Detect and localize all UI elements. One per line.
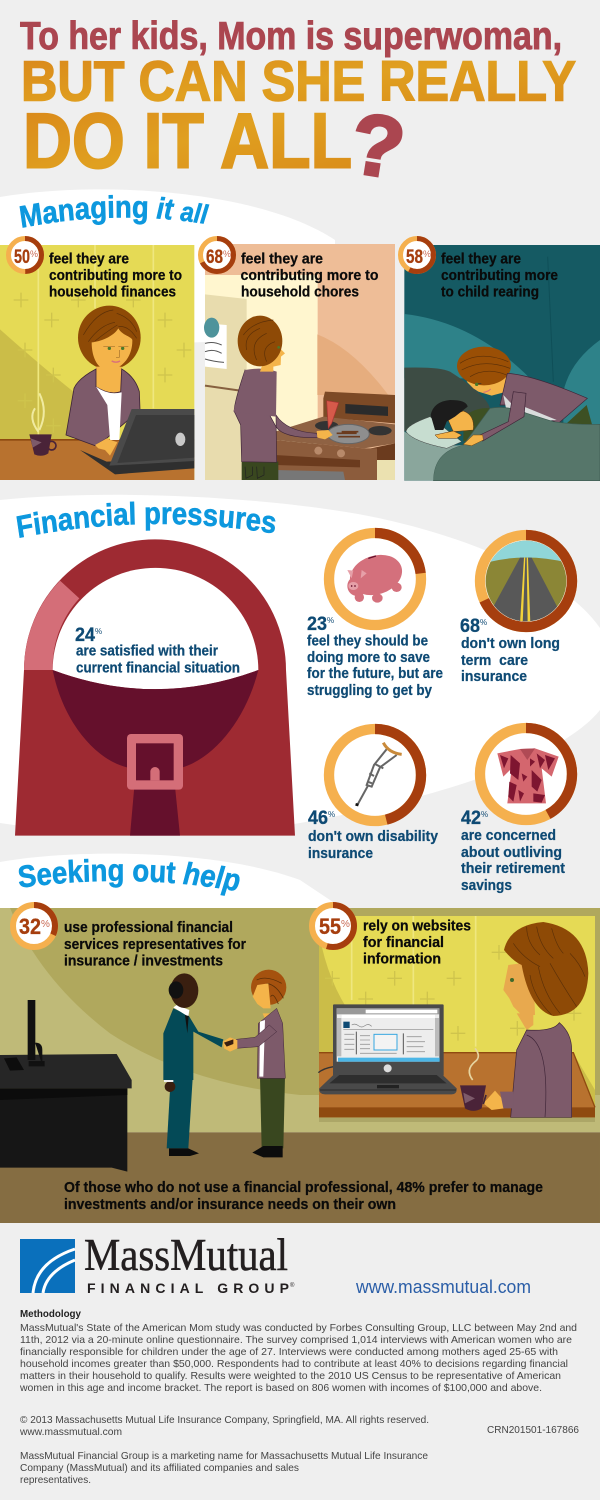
text: chores [240, 250, 378, 300]
text: chores: household chores [241, 284, 359, 300]
text: websites [363, 918, 471, 968]
logo: MassMutual: FINANCIAL GROUP [87, 1280, 289, 1296]
badge: 68%: 68 [206, 247, 223, 268]
text: marketing name note: MassMutual Financial Group is a marketing name for Massachusetts Mutual Life Insurance [20, 1450, 428, 1462]
text: 23% save: % [327, 616, 334, 625]
text: methodology: Methodology [20, 1308, 81, 1320]
text: 23% save: for the future, but are [307, 665, 443, 682]
heading: Seeking out help: Seeking out help [18, 858, 240, 896]
text: methodology: 11th, 2012 via a 20-minute online questionnaire. The survey comprised 1,014 interviews with American women who are [20, 1334, 572, 1346]
text: professional representatives: insurance / investments [64, 952, 223, 970]
text: 48% callout: investments and/or insurance needs on their own [64, 1196, 396, 1213]
text: 46% disability: 46 [308, 808, 328, 829]
icon: woman shaking hands [223, 970, 286, 1157]
badge: 32%: 32 [19, 914, 41, 939]
badge: 50%: 50 [14, 247, 30, 268]
icon: piggy bank [345, 548, 407, 603]
text: 68% long term care: term care [461, 652, 528, 669]
icon: coffee cup [29, 393, 56, 456]
heading: Financial pressures: Financial pressures [16, 502, 276, 538]
text: websites: rely on websites [363, 918, 471, 934]
chart: 46% crutch ring [329, 729, 421, 821]
logo: MassMutual: ® [290, 1282, 295, 1289]
text: child rearing: to child rearing [441, 284, 539, 300]
chart: 23% piggy ring [329, 533, 421, 625]
text: methodology: women in this age and income bracket. The report is based on 806 women with incomes of $100,000 and above. [19, 1382, 542, 1394]
badge: 32%: % [41, 919, 50, 930]
text: copyright: www.massmutual.com [19, 1426, 122, 1438]
text: 46% disability: don't own disability [308, 828, 439, 845]
link: website: www.massmutual.com [355, 1277, 531, 1297]
heading: Managing it all: Managing it all [20, 194, 210, 228]
badge: 50% [8, 238, 42, 272]
icon: coffee cup [460, 1048, 486, 1111]
icon: stove [275, 392, 395, 480]
text: 46% disability: insurance [308, 845, 373, 862]
text: 24% satisfied: % [95, 627, 102, 636]
badge: 55%: 55 [319, 914, 341, 939]
text: 23% save: struggling to get by [307, 682, 433, 699]
text: professional representatives [64, 919, 246, 970]
text: 24% satisfied: current financial situation [76, 660, 240, 676]
badge: 58%: 58 [406, 247, 423, 268]
text: websites: for financial [363, 934, 444, 951]
text: 42% retirement: their retirement [461, 860, 565, 877]
badge: 32% [13, 905, 55, 947]
icon: mother and sleeping child [404, 347, 600, 481]
title: DO IT ALL [23, 96, 352, 184]
text: 48% callout [64, 1179, 543, 1213]
badge: 68%: % [223, 249, 231, 259]
logo: MassMutual: MassMutual [84, 1230, 288, 1280]
text: 42% retirement: savings [461, 877, 512, 894]
text: finances [49, 250, 182, 300]
icon: crutch [357, 743, 402, 806]
icon: woman cooking [233, 316, 333, 480]
text: professional representatives: services representatives for [64, 936, 246, 953]
text: 42% retirement: % [481, 810, 488, 819]
text: methodology: household incomes greater than $50,000. Respondents had to contribute at least 40% to decisions regarding financial [20, 1358, 568, 1370]
text: CRN code: CRN201501-167866 [487, 1424, 579, 1436]
text: 23% save: feel they should be [307, 632, 428, 650]
text: copyright [19, 1414, 429, 1438]
icon: woman at laptop [66, 306, 141, 456]
badge: 58% [400, 238, 434, 272]
text: chores: contributing more to [240, 267, 378, 284]
text: methodology: financially responsible for children under the age of 27. Interviews were conducted among mothers aged 25-65 with [20, 1346, 558, 1358]
text: professional representatives: use professional financial [64, 919, 233, 936]
text: child rearing [441, 250, 558, 300]
chart: 68% road ring [480, 535, 572, 627]
icon: laptop [80, 409, 194, 474]
icon: laptop with website [318, 1004, 457, 1094]
badge: 55%: % [341, 919, 350, 930]
text: 68% long term care: % [480, 618, 487, 627]
text: 24% satisfied: are satisfied with their [76, 642, 218, 660]
text: 68% long term care: insurance [461, 668, 527, 685]
text: finances: household finances [49, 284, 176, 300]
badge: 58%: % [423, 249, 431, 259]
text: 46% disability: % [328, 810, 335, 819]
text: 42% retirement [461, 808, 565, 894]
text: methodology: MassMutual's State of the American Mom study was conducted by Forbes Consulting Group, LLC between May 2nd and [20, 1322, 577, 1334]
text: methodology [19, 1308, 577, 1394]
chart: purse 24% [15, 539, 295, 836]
panel: household finances [0, 245, 194, 480]
text: websites: information [363, 950, 441, 968]
text: 23% save: 23 [307, 614, 327, 635]
icon: man in suit [163, 973, 223, 1156]
text: marketing name note [20, 1450, 428, 1486]
text: 46% disability [308, 808, 439, 862]
icon: desk and monitor [0, 1000, 132, 1172]
text: copyright: © 2013 Massachusetts Mutual Life Insurance Company, Springfield, MA. All rights reserved. [20, 1414, 429, 1426]
text: 23% save [307, 614, 443, 699]
icon: woman at website [483, 922, 588, 1117]
text: finances: feel they are [49, 250, 129, 268]
text: 24% satisfied: 24 [75, 625, 95, 646]
text: 42% retirement: about outliving [461, 844, 562, 861]
text: methodology: matters in their household to qualify. Results were weighted to the 2010 US Census to be representative of American [20, 1370, 561, 1382]
icon: road [486, 540, 566, 622]
text: 24% satisfied [75, 625, 240, 676]
panel: child rearing [404, 245, 600, 481]
title [20, 15, 576, 198]
text: 68% long term care: 68 [460, 616, 480, 637]
text: child rearing: feel they are [441, 250, 521, 268]
panel: household chores [204, 244, 395, 480]
panel: seeking help office scene [0, 908, 600, 1223]
badge: 68% [200, 238, 234, 272]
badge: 50%: % [30, 249, 38, 259]
text: marketing name note: Company (MassMutual) and its affiliated companies and sales [20, 1462, 299, 1474]
text: 48% callout: Of those who do not use a financial professional, 48% prefer to manage [64, 1179, 543, 1196]
text: 68% long term care: don't own long [461, 635, 560, 652]
chart: 42% shirt ring [480, 728, 572, 820]
text: 23% save: doing more to save [307, 649, 430, 666]
text: child rearing: contributing more [441, 267, 558, 284]
text: finances: contributing more to [49, 267, 182, 284]
text: chores: feel they are [241, 250, 323, 268]
title: ? [344, 95, 411, 198]
text: 68% long term care [460, 616, 560, 685]
panel: websites scene [318, 916, 595, 1122]
text: marketing name note: representatives. [20, 1474, 91, 1486]
logo: MassMutual [20, 1230, 295, 1296]
badge: 55% [312, 905, 354, 947]
text: 42% retirement: are concerned [461, 827, 556, 844]
text: 42% retirement: 42 [461, 808, 481, 829]
icon: hawaiian shirt [497, 748, 559, 803]
